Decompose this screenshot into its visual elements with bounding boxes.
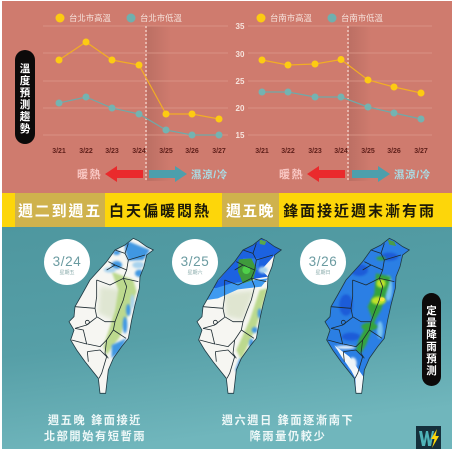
date badge: 3/26: 3/26 [309,254,337,269]
axis: temperature values: 35 [236,22,245,31]
axis: temperature values [236,22,245,140]
date axis: Tainan: 3/26 [387,148,401,155]
date axis: Tainan: 3/27 [414,148,428,155]
date badge: 3/25 [172,239,218,285]
axis: temperature values: 30 [236,50,245,59]
map: 3/25 rainfall [197,238,281,393]
date badge: 3/26 [300,239,346,285]
legend: Taipei: 台北市低溫 [140,13,182,23]
caption: Friday front: 北部開始有短暫雨 [44,429,146,443]
arrow legend: Tainan warm and cool: 濕涼/冷 [394,168,431,181]
date axis: Taipei: 3/24 [132,148,146,155]
date axis: Tainan: 3/24 [334,148,348,155]
pill heading: temperature trend: 勢 [20,122,31,135]
chart: Taipei temperature [43,13,228,182]
caption: weekend front [222,413,354,443]
pill heading: temperature trend: 度 [20,74,31,87]
date badge: 3/24 [44,239,90,285]
axis: temperature values: 15 [236,131,245,140]
date badge: 3/26: 星期日 [315,270,331,276]
legend: Tainan: 台南市低溫 [341,13,383,23]
banner: weather headline: 鋒面接近週末漸有雨 [283,202,436,220]
axis: temperature values: 20 [236,104,245,113]
pill heading: temperature trend: 測 [20,98,30,111]
panel: temperature trend [2,1,452,193]
date axis: Taipei: 3/25 [159,148,173,155]
date axis: Taipei: 3/22 [79,148,93,155]
banner: weather headline: 週五晚 [226,203,275,220]
pill heading: rainfall forecast: 定 [426,304,437,317]
pill heading: temperature trend: 趨 [20,110,31,123]
date axis: Tainan [255,148,428,155]
arrow legend: Tainan warm and cool: 暖熱 [279,167,304,181]
arrow legend: Taipei warm and cool: 暖熱 [77,167,102,181]
banner: weather headline: 週二到週五 [18,203,102,220]
chart: Tainan temperature [248,13,432,182]
line: Taipei low [56,94,222,138]
pill heading: temperature trend: 溫 [20,62,31,75]
map: 3/24 rainfall [69,238,153,393]
date axis: Taipei: 3/21 [52,148,66,155]
date badge: 3/25: 星期六 [187,269,203,276]
line: Tainan high [258,56,424,96]
date badge: 3/24: 3/24 [53,254,81,269]
axis: temperature values: 25 [236,77,245,86]
line: Taipei high [56,38,222,122]
arrow legend: Tainan warm and cool [279,166,431,182]
date badge: 3/24: 星期五 [59,270,75,276]
logo [416,426,441,449]
line: Tainan low [258,88,424,122]
pill heading: rainfall forecast: 預 [426,352,437,365]
date axis: Tainan: 3/22 [281,148,295,155]
arrow legend: Taipei warm and cool [77,166,228,182]
caption: weekend front: 降雨量仍較少 [250,429,326,443]
legend: Taipei [56,13,182,23]
date axis: Tainan: 3/21 [255,148,269,155]
legend: Tainan: 台南市高溫 [270,13,312,23]
date badge: 3/25: 3/25 [181,254,209,269]
pill heading: rainfall forecast: 雨 [426,341,437,353]
pill heading: rainfall forecast: 降 [426,328,437,341]
date axis: Tainan: 3/23 [308,148,322,155]
banner: weather headline: 白天偏暖悶熱 [109,202,211,220]
date axis: Taipei: 3/26 [185,148,199,155]
caption: Friday front [44,413,146,443]
pill heading: temperature trend: 預 [20,86,31,99]
date axis: Taipei: 3/23 [105,148,119,155]
legend: Tainan [256,13,383,23]
pill heading: temperature trend [15,50,35,144]
legend: Taipei: 台北市高溫 [69,13,111,23]
pill heading: rainfall forecast [422,293,441,386]
date axis: Tainan: 3/25 [361,148,375,155]
date axis: Taipei: 3/27 [212,148,226,155]
panel: rainfall forecast [2,227,452,449]
arrow legend: Taipei warm and cool: 濕涼/冷 [191,168,228,181]
pill heading: rainfall forecast: 測 [426,364,437,377]
banner: weather headline [2,193,452,227]
caption: Friday front: 週五晚 鋒面接近 [48,413,142,427]
caption: weekend front: 週六週日 鋒面逐漸南下 [222,413,354,427]
date axis: Taipei [52,148,226,155]
pill heading: rainfall forecast: 量 [426,317,437,329]
map: 3/26 rainfall [325,238,409,393]
